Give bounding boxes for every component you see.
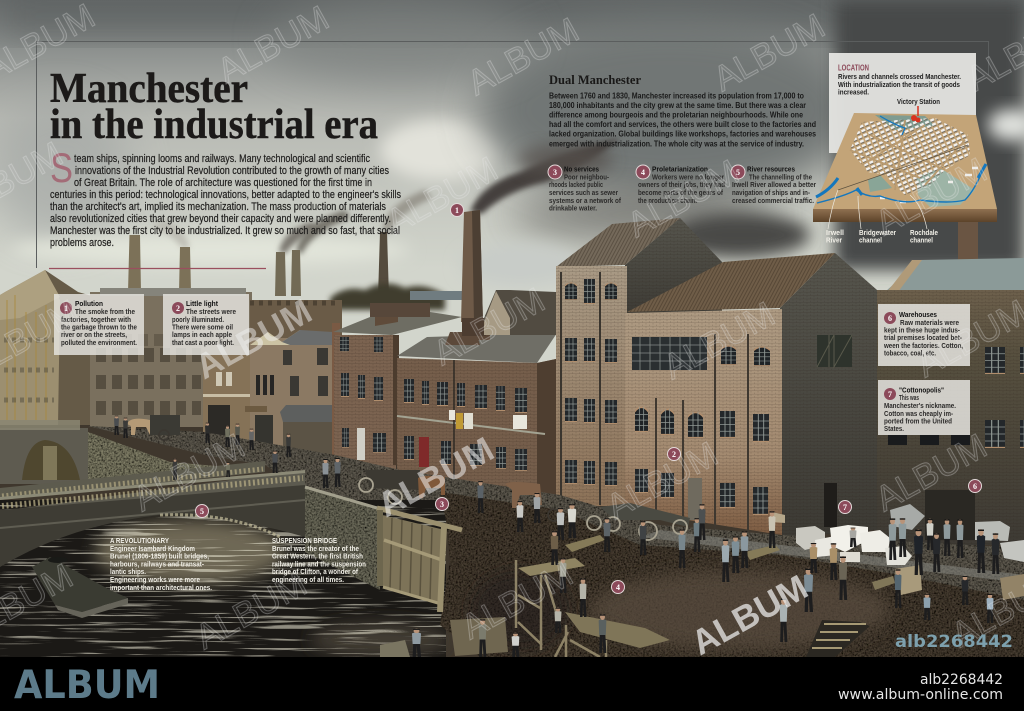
panel 6: warehouses — [878, 304, 970, 366]
title: Manchester — [50, 66, 248, 112]
cotton bales and crates — [380, 504, 1024, 657]
note 5: river resources: River resources — [747, 164, 795, 174]
note 5: river resources: 5 — [736, 168, 740, 177]
note 4: proletarianization: owners of their jobs, they had — [638, 180, 725, 189]
panel 2: little light: that cast a poor light. — [172, 338, 234, 347]
footer credits: alb2268442 — [920, 672, 1003, 688]
caption: suspension bridge: Brunel was the creator of the — [272, 544, 359, 553]
canal water — [0, 500, 450, 658]
image id stamp: alb2268442 — [895, 632, 1013, 652]
3D city map — [813, 106, 997, 222]
map labels: Bridgewater — [859, 228, 896, 237]
panel 7: Cottonopolis: Cotton was cheaply im- — [884, 409, 953, 418]
note 4: proletarianization: 4 — [641, 168, 645, 177]
intro text with drop cap: centuries in this period: technological innovations, better adapted to the engineer's skills — [50, 189, 401, 201]
intro text with drop cap: problems arose. — [50, 237, 114, 249]
panel 2: little light: Little light — [186, 299, 218, 308]
intro text with drop cap: of Great Britain. The role of architecture was questioned for the first time in — [74, 177, 372, 189]
watermark repeats: ALBUM — [427, 280, 551, 373]
ground base under the town — [0, 425, 1024, 657]
panel 7: Cottonopolis: 7 — [888, 390, 892, 399]
text: Dual Manchester body: emerged with industrialization. The whole city was at the service of industry. — [549, 138, 804, 148]
number markers on the scene: 2 — [672, 450, 676, 459]
number markers on the scene: 7 — [843, 503, 847, 512]
intro text with drop cap: also revolutionized cities that grew beyond their capacity and were planned differently. — [50, 213, 391, 225]
note 3: no services: 3 — [553, 168, 557, 177]
location text: Rivers and channels crossed Manchester. — [838, 72, 961, 81]
caption: a revolutionary: Brunel (1806-1859) built bridges, — [110, 552, 209, 560]
intro text with drop cap: than the architect's art, implied its mechanization. The mass production of materials — [50, 201, 386, 213]
panel 6: warehouses: 6 — [888, 314, 892, 323]
panel 2: little light — [163, 294, 249, 355]
watermark repeats: ALBUM — [685, 568, 814, 663]
caption: a revolutionary: harbours, railways and transat- — [110, 560, 204, 568]
corner houses on the street — [245, 300, 342, 458]
panel 6: warehouses: Warehouses — [899, 310, 937, 319]
note 4: proletarianization: the production chain. — [638, 196, 697, 205]
watermark repeats: ALBUM — [869, 150, 993, 243]
note 3: no services: Poor neighbou- — [564, 172, 609, 182]
watermark repeats: ALBUM — [380, 149, 504, 242]
distant chimneys and treeline — [128, 222, 978, 310]
watermark repeats: ALBUM — [600, 434, 724, 527]
map labels: channel — [910, 236, 933, 244]
embankment wall — [305, 487, 380, 590]
title — [50, 66, 378, 148]
panel 6: warehouses: trial premises located bet- — [884, 333, 962, 342]
map labels — [826, 190, 938, 244]
wooden scaffolds and stairs — [516, 535, 895, 657]
text: Dual Manchester body: difference among bourgeois and the proletarian neighbourhoods. While one — [549, 110, 803, 120]
title: in the industrial era — [50, 102, 378, 148]
stone bridges and parapets — [0, 420, 305, 567]
note 5: river resources: Irwell River allowed a better — [732, 180, 816, 189]
caption: suspension bridge: bridge of Clifton, a wonder of — [272, 567, 358, 576]
map labels: channel — [859, 236, 882, 244]
big factory chimney — [461, 210, 556, 336]
panel 6: warehouses: kept in these huge indus- — [884, 326, 960, 334]
panel 7: Cottonopolis: "Cottonopolis" — [899, 386, 944, 394]
note 4: proletarianization — [636, 164, 725, 205]
text: Dual Manchester body: had all the comfort and services, the others were built close to the factories and — [549, 119, 816, 129]
map labels: River — [826, 236, 842, 244]
panel 1: pollution: the garbage thrown to the — [61, 322, 137, 332]
panel 2: little light: poorly illuminated. — [172, 315, 224, 324]
note 3: no services: systems or a network of — [549, 196, 621, 205]
caption: suspension bridge: engineering of all times. — [272, 575, 344, 584]
panel 7: Cottonopolis: Manchester's nickname. — [884, 401, 956, 410]
location text: increased. — [838, 88, 869, 96]
text: Dual Manchester body: Between 1760 and 1830, Manchester increased its population from 17,000 to — [549, 90, 804, 100]
panel 1: pollution: river or on the streets, — [61, 330, 127, 339]
panel 1: pollution: The smoke from the — [75, 307, 135, 316]
location text — [838, 64, 961, 106]
smoke plumes from chimneys — [150, 138, 620, 254]
carts and horses — [127, 415, 690, 540]
caption: suspension bridge: SUSPENSION BRIDGE — [272, 536, 337, 545]
lock gate — [377, 508, 462, 612]
watermark repeats: ALBUM — [621, 152, 745, 245]
panel 1: pollution — [54, 294, 144, 355]
caption: a revolutionary: important than architectural ones. — [110, 583, 212, 592]
caption: a revolutionary — [110, 536, 212, 592]
watermark repeats: ALBUM — [707, 6, 831, 99]
intro text with drop cap: team ships, spinning looms and railways. Many technological and scientific — [74, 153, 371, 165]
watermark repeats: ALBUM — [657, 294, 781, 387]
note 5: river resources: navigation of ships and in- — [732, 188, 810, 197]
number markers on the scene: 5 — [200, 507, 204, 516]
note 3: no services: drinkable water. — [549, 204, 597, 212]
caption: a revolutionary: Engineer Isambard Kingdom — [110, 544, 195, 553]
caption: a revolutionary: Engineering works were more — [110, 575, 200, 584]
caption: suspension bridge: Great Western, the first British — [272, 552, 363, 560]
panel 2: little light: There were some oil — [172, 322, 233, 332]
location text: With industrialization the transit of goods — [838, 80, 960, 89]
number markers on the scene: 4 — [616, 583, 620, 592]
number markers on the scene: 6 — [973, 482, 977, 491]
caption: suspension bridge — [272, 536, 366, 584]
watermark repeats: ALBUM — [371, 430, 500, 525]
text: Dual Manchester body: lacked organization. Global buildings like workshops, factories and warehouses — [549, 129, 816, 139]
map labels: Irwell — [826, 228, 844, 237]
intro text with drop cap: Manchester was the first city to be industrialized. It grew so much and so fast, that social — [50, 225, 400, 237]
note 3: no services — [548, 164, 621, 212]
footer credits: www.album-online.com — [838, 687, 1003, 703]
factory building A — [556, 218, 722, 506]
watermark repeats: ALBUM — [189, 292, 318, 387]
number markers on the scene — [196, 204, 982, 594]
footer bar — [0, 657, 1024, 711]
brick terrace with roofs — [333, 303, 557, 495]
panel 7: Cottonopolis: States. — [884, 424, 904, 433]
caption: a revolutionary: A REVOLUTIONARY — [110, 536, 169, 545]
background mill behind info panels — [90, 288, 252, 452]
text: Dual Manchester body: 180,000 inhabitants and the city grew at the same time. But there was a clear — [549, 100, 807, 110]
panel 6: warehouses: Raw materials were — [900, 318, 959, 327]
note 5: river resources: creased commercial traffic. — [732, 196, 814, 205]
number markers on the scene: 3 — [440, 500, 444, 509]
watermark repeats: ALBUM — [189, 564, 313, 657]
street and forecourt — [88, 426, 1024, 600]
panel 7: Cottonopolis: ported from the United — [884, 416, 952, 426]
panel: location map — [813, 53, 997, 244]
note 5: river resources — [731, 164, 816, 205]
panel 1: pollution: polluted the environment. — [61, 338, 137, 347]
earth embankment — [440, 492, 1024, 657]
note 4: proletarianization: Workers were no longer — [652, 172, 724, 182]
panel 1: pollution: Pollution — [75, 299, 103, 308]
location text: Victory Station — [897, 97, 940, 106]
caption: a revolutionary: lantic ships. — [110, 567, 146, 576]
footer credits — [838, 672, 1003, 703]
intro text with drop cap — [50, 144, 401, 249]
far left mill with gable — [0, 270, 92, 425]
note 3: no services: No services — [564, 164, 599, 174]
footer logo: ALBUM — [14, 663, 160, 708]
warehouse building on the right — [877, 258, 1024, 545]
note 3: no services: rhoods lacked public — [549, 180, 603, 189]
note 3: no services: services such as sewer — [549, 188, 618, 197]
watermark repeats: ALBUM — [461, 10, 585, 103]
location text: LOCATION — [838, 64, 869, 72]
note 5: river resources: The channelling of the — [749, 172, 812, 182]
text: Dual Manchester body — [549, 90, 816, 148]
workers on the site — [114, 416, 999, 657]
panel 1: pollution: factories, together with — [61, 315, 131, 324]
intro text with drop cap: innovations of the Industrial Revolution contributed to the growth of many cities — [75, 165, 389, 177]
barge on the canal — [32, 557, 128, 618]
panel 7: Cottonopolis: This was — [899, 393, 919, 402]
caption: suspension bridge: railway line and the suspension — [272, 560, 366, 568]
factory building B — [625, 253, 877, 538]
map labels: Rochdale — [910, 228, 938, 237]
panel 2: little light: The streets were — [186, 307, 236, 316]
panel 1: pollution: 1 — [64, 304, 68, 313]
panel 6: warehouses: ween the factories. Cotton, — [883, 341, 963, 350]
note 4: proletarianization: Proletarianization — [652, 164, 708, 174]
note 4: proletarianization: become parts of the gears of — [638, 188, 723, 197]
panel 6: warehouses: tobacco, coal, etc. — [884, 348, 936, 358]
heading: Dual Manchester: Dual Manchester — [549, 72, 641, 87]
panel 7: Cottonopolis — [878, 380, 970, 435]
panel 2: little light: lamps in each apple — [172, 330, 232, 339]
accent rule — [49, 268, 266, 270]
number markers on the scene: 1 — [455, 206, 459, 215]
watermark repeats: ALBUM — [211, 0, 335, 91]
intro text with drop cap: S — [50, 144, 73, 191]
location card — [829, 53, 976, 153]
frame lines — [36, 42, 988, 268]
watermark repeats: ALBUM — [455, 554, 579, 647]
watermark repeats: ALBUM — [869, 426, 993, 519]
watermark repeats: ALBUM — [127, 426, 251, 519]
panel 2: little light: 2 — [176, 304, 180, 313]
